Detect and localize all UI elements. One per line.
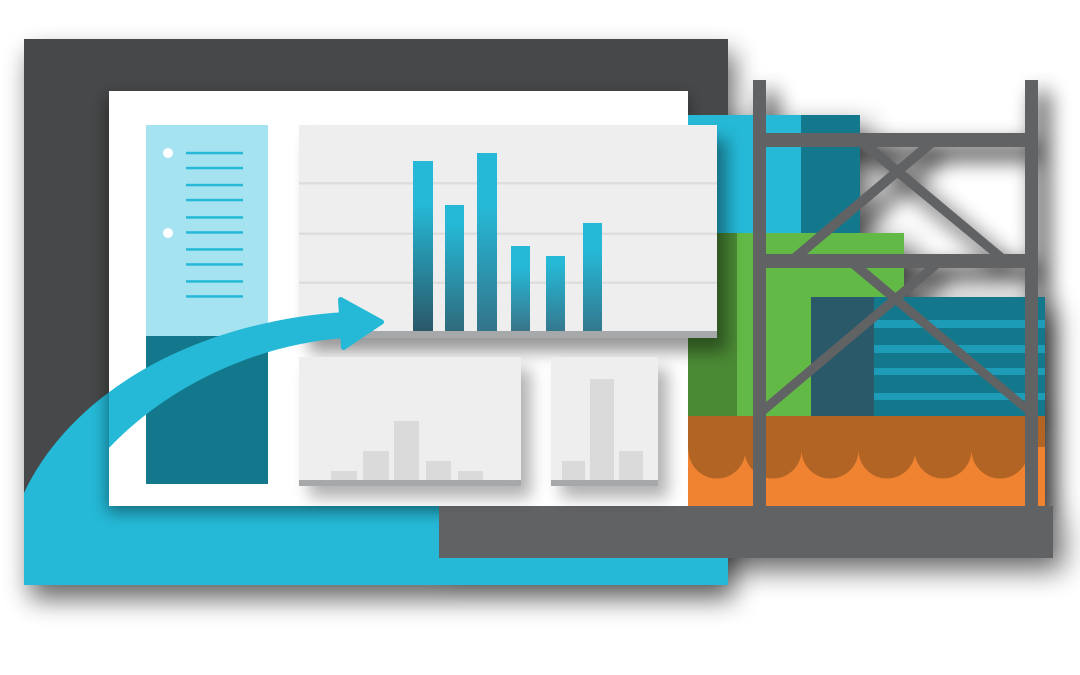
light green block (737, 233, 904, 416)
brown scalloped soil (688, 416, 1045, 478)
main chart card (299, 125, 717, 338)
shadow: outer dashboard panel (30, 53, 734, 599)
small chart right (551, 357, 658, 486)
white screen (109, 91, 688, 506)
shadow: white screen (107, 97, 688, 512)
sidebar bullets (163, 148, 173, 238)
dark teal door (811, 297, 874, 416)
building (688, 115, 1045, 506)
striped teal block (874, 297, 1045, 416)
scaffold (439, 80, 1053, 558)
shadow: main chart card (309, 139, 727, 352)
cyan block (688, 115, 801, 233)
shadow: building and base (449, 127, 1063, 570)
outer dashboard panel (24, 39, 728, 585)
shadow: small chart cards (309, 369, 668, 498)
orange foundation (688, 416, 1045, 506)
bar chart (413, 153, 602, 331)
cyan base of panel (24, 312, 728, 585)
sidebar panel (146, 125, 268, 484)
shadow: scaffold frame (763, 92, 1048, 518)
sidebar text lines (186, 152, 243, 298)
teal block (801, 115, 860, 233)
dark green block (688, 233, 737, 416)
arrow (109, 297, 384, 448)
small chart left (299, 357, 521, 486)
